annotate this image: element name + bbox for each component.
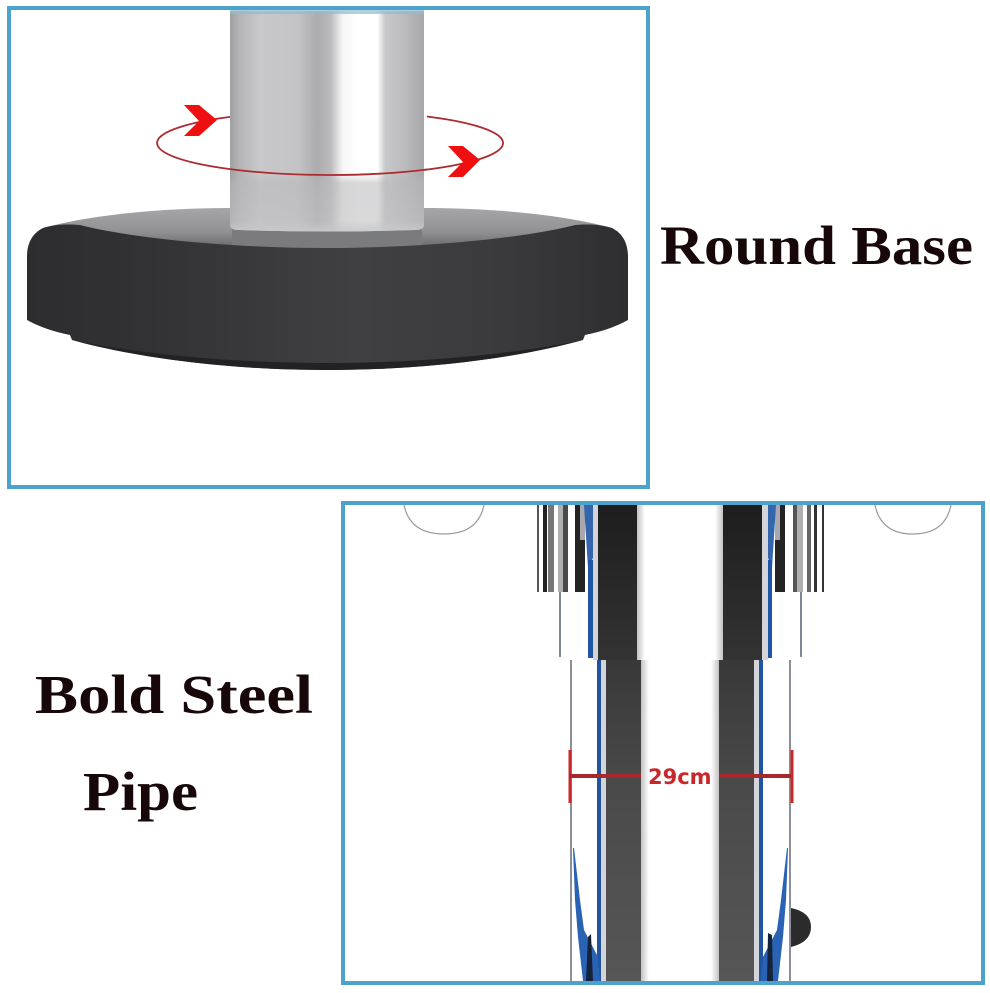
heading: bold steel: Bold Steel — [35, 664, 313, 725]
icon: right arrowhead — [448, 146, 480, 177]
panel: round base — [9, 8, 648, 487]
right blue reflection — [761, 848, 788, 981]
panel: bold steel pipe — [343, 503, 983, 983]
knob — [791, 908, 811, 947]
dimension marker — [568, 750, 794, 803]
pipe collar shadow — [232, 226, 422, 248]
left pole — [570, 505, 649, 981]
left top arc — [404, 505, 484, 534]
left clamp stack — [537, 505, 598, 660]
rotation arrow front half — [230, 169, 427, 175]
left blue reflection — [573, 848, 600, 981]
left dark reflection — [586, 934, 593, 981]
heading: pipe: Pipe — [83, 761, 198, 822]
base top surface — [43, 208, 612, 250]
base foot — [72, 340, 583, 370]
dimension label: 29cm — [648, 765, 712, 789]
base body — [27, 224, 628, 370]
right top arc — [875, 505, 951, 534]
rotation arrow back half — [157, 116, 503, 175]
heading: round base: Round Base — [660, 215, 973, 276]
right clamp stack — [762, 505, 824, 660]
icon: left arrowhead — [184, 105, 217, 136]
right pole — [711, 505, 791, 981]
steel pipe — [230, 10, 424, 232]
right dark reflection — [767, 933, 773, 981]
